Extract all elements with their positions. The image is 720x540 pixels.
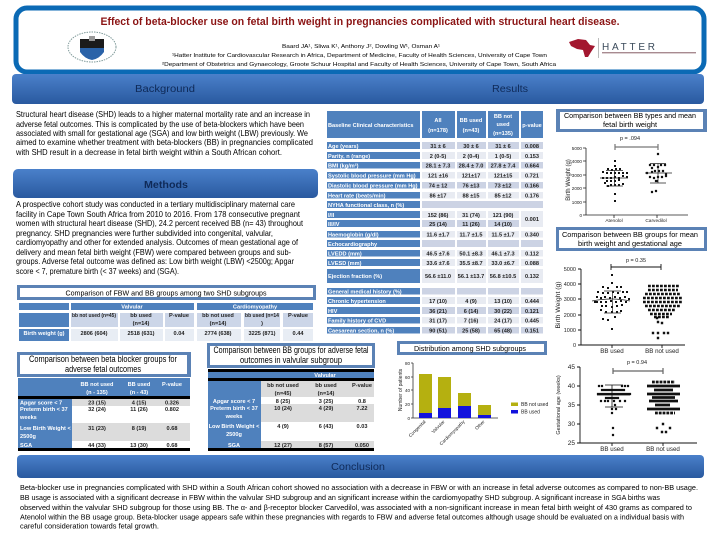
table: adverse outcomes overall: BB used bbox=[128, 382, 151, 388]
data points: BB used bbox=[598, 386, 630, 435]
table rows: values: 85 ±12 bbox=[494, 194, 512, 200]
text block: conclusion: Atenolol within the BB usage group. Beta-blocker usage appears safe within these pregnancies with regards to FBW and adverse fetal outcomes although usage should be evaluated on a individual basis with bbox=[20, 512, 684, 522]
chart: birth weight BB used vs not used: Birth Weight (g) bbox=[555, 281, 562, 329]
table: FBW by subgroup: 2806 (604) bbox=[80, 331, 108, 337]
table rows: values: 121±15 bbox=[494, 174, 512, 180]
table: adverse outcomes valvular: 4 (9) bbox=[277, 424, 289, 430]
text block: methods: delivery and mean fetal birth weight (FBW) were compared between groups and sub- bbox=[16, 247, 291, 257]
table: adverse outcomes valvular: 0.8 bbox=[358, 399, 366, 405]
text block: conclusion: observed within the valvular SHD subgroup for those using BB. The α- and β-receptor blocker Carvedilol, was associated with a non-significant increase in mean fetal birth weight of 430 grams as compared to bbox=[20, 503, 692, 512]
authors and affiliations: ¹Hatter Institute for Cardiovascular Research in Africa, Department of Medicine, Faculty of Health Sciences, University of Cape Town bbox=[172, 53, 547, 59]
text block: conclusion: careful consideration towards fetal growth. bbox=[20, 522, 159, 530]
table: adverse outcomes valvular: Preterm birth < 37 bbox=[210, 406, 258, 412]
chart: birth weight BB used vs not used: p = 0.35 bbox=[626, 258, 646, 264]
icon: Hatter logo bbox=[569, 38, 696, 58]
table: adverse outcomes overall: 2500g bbox=[20, 434, 36, 440]
table: FBW by subgroup: bb used (n=14 bbox=[245, 313, 280, 319]
table rows: values: 0.721 bbox=[525, 174, 539, 180]
table: adverse outcomes overall: 32 (24) bbox=[88, 407, 106, 413]
chart: birth weight by BB type: Birth Weight (g) bbox=[566, 159, 572, 201]
table rows: values: 76 ±13 bbox=[462, 184, 480, 190]
table: FBW by subgroup: (n=14) bbox=[133, 321, 149, 327]
section header: Methods: Methods bbox=[144, 180, 188, 191]
table rows: values: 30 ± 6 bbox=[463, 144, 479, 150]
chart: stacked bars of SHD subgroups bbox=[398, 361, 548, 446]
table rows: values: 11.7 ±1.5 bbox=[460, 232, 482, 238]
heading box: adverse outcomes: adverse fetal outcomes bbox=[65, 364, 141, 374]
table rows: labels: Family history of CVD bbox=[328, 318, 386, 324]
heading box: adverse outcomes in valvular subgroup bbox=[207, 343, 375, 368]
table rows: labels: Echocardiography bbox=[328, 242, 378, 248]
table rows: labels: HIV bbox=[328, 309, 338, 315]
table rows: values: 0.112 bbox=[525, 252, 539, 258]
heading box: distribution bbox=[397, 341, 547, 355]
table: adverse outcomes overall: 0.68 bbox=[167, 426, 177, 432]
data points: BB used bbox=[595, 275, 629, 329]
table rows: values: 33.0 ±6.7 bbox=[491, 261, 515, 267]
text block: conclusion: BB usage is associated with a significant decrease in FBW within the valvular SHD subgroup and an significant increase within the cardiomyopathy SHD subgroup. A significant increase in SGA births was bbox=[20, 493, 660, 502]
chart: gestational age BB used vs not used: 40 bbox=[568, 383, 575, 390]
table: adverse outcomes valvular: bb not used bbox=[267, 383, 299, 389]
table header: (n=135) bbox=[493, 131, 513, 137]
chart: birth weight BB used vs not used: BB used bbox=[600, 348, 624, 355]
table header: (n=43) bbox=[463, 128, 479, 134]
table header: BB used bbox=[460, 118, 483, 124]
legend: BB not used bbox=[521, 402, 548, 408]
section header: Conclusion: Conclusion bbox=[331, 462, 385, 473]
table: adverse outcomes valvular: 0.03 bbox=[357, 424, 367, 430]
table header: All bbox=[434, 118, 442, 124]
table rows: labels: NYHA functional class, n (%) bbox=[328, 203, 404, 209]
text block: background: Structural heart disease (SHD) leads to a higher maternal mortality rate and an increase in bbox=[16, 109, 310, 119]
table rows: values: 31 (74) bbox=[462, 213, 480, 219]
table: adverse outcomes overall: 31 (23) bbox=[88, 426, 106, 432]
table rows: values: 11 (26) bbox=[462, 222, 480, 228]
chart: birth weight by BB type: 4000 bbox=[572, 159, 582, 164]
table: adverse outcomes overall: Apgar score < 7 bbox=[20, 400, 62, 406]
table header: BB not bbox=[494, 114, 512, 120]
chart: birth weight by BB type: Atenolol bbox=[605, 218, 623, 224]
text block: background: adverse fetal outcomes. This is complicated by the use of beta-blockers which have been bbox=[16, 119, 304, 129]
table rows: values: 0.445 bbox=[525, 318, 539, 324]
title: Effect of beta-blocker use on fetal birth weight in pregnancies complicated with structural heart disease. bbox=[100, 16, 620, 28]
table rows: values: 2 (0-5) bbox=[430, 154, 446, 160]
heading box: adverse outcomes bbox=[17, 352, 191, 377]
text block: methods bbox=[15, 199, 304, 276]
table rows: values: 2 (0-4) bbox=[463, 154, 479, 160]
table rows: labels: Diastolic blood pressure (mm Hg) bbox=[328, 184, 418, 190]
table: adverse outcomes overall: 0.68 bbox=[167, 443, 177, 449]
heading box: adverse outcomes in valvular subgroup: outcomes in valvular subgroup bbox=[240, 355, 342, 365]
table: FBW by subgroup: Valvular bbox=[121, 304, 144, 310]
table rows: labels: III/IV bbox=[328, 222, 340, 228]
table rows: labels: Caesarean section, n (%) bbox=[328, 328, 394, 334]
table rows: values: 0.008 bbox=[525, 144, 539, 150]
legend bbox=[511, 402, 548, 416]
table: adverse outcomes overall: P-value bbox=[162, 382, 182, 388]
table rows: labels: General medical history (%) bbox=[328, 290, 402, 296]
table rows: values: 65 (48) bbox=[494, 328, 512, 334]
data points: Carvedilol bbox=[647, 154, 666, 192]
table: adverse outcomes overall: 0.802 bbox=[165, 407, 179, 413]
chart: stacked bars of SHD subgroups: Number of patients bbox=[398, 368, 404, 411]
table rows: values: 28.4 ± 7.0 bbox=[459, 164, 483, 170]
table rows: labels: LVESD (mm) bbox=[328, 261, 362, 267]
table: FBW by subgroup: 2518 (631) bbox=[127, 331, 155, 337]
table rows: values: 27.8 ± 7.4 bbox=[491, 164, 516, 170]
table: FBW by subgroup: Birth weight (g) bbox=[23, 331, 65, 337]
bar labels: Congenital bbox=[408, 419, 427, 438]
table rows: values: 30 (22) bbox=[494, 309, 512, 315]
authors and affiliations: ²Department of Obstetrics and Gynaecology, Groote Schuur Hospital and Faculty of Health Sciences, University of Cape Town, South Africa bbox=[162, 62, 557, 68]
table: FBW by subgroup: 2774 (638) bbox=[204, 331, 232, 337]
table rows: values: 0.664 bbox=[525, 164, 540, 170]
table rows: values: 17 (10) bbox=[429, 299, 447, 305]
table rows: values: 31 (17) bbox=[429, 318, 447, 324]
table rows: values: 1 (0-5) bbox=[495, 154, 511, 160]
chart: gestational age BB used vs not used: 35 bbox=[568, 402, 575, 409]
heading box: adverse outcomes: Comparison between beta blocker groups for bbox=[29, 354, 177, 364]
table: FBW by subgroup: P-value bbox=[288, 313, 308, 319]
heading: Background: Background bbox=[135, 84, 195, 95]
table: FBW by subgroup: P-value bbox=[169, 313, 189, 319]
table rows: labels: Ejection fraction (%) bbox=[328, 274, 382, 280]
table: FBW by subgroup bbox=[19, 303, 313, 341]
table rows: values: 11.5 ±1.7 bbox=[492, 232, 514, 238]
table: adverse outcomes valvular: Low Birth Weight < bbox=[209, 424, 260, 430]
chart: birth weight by BB type: 3000 bbox=[572, 173, 582, 178]
table rows: first column bbox=[327, 142, 420, 334]
table rows: values: 31 ± 6 bbox=[495, 144, 511, 150]
chart: stacked bars of SHD subgroups: 80 bbox=[405, 361, 410, 366]
table rows: values: 121 (90) bbox=[493, 213, 514, 219]
table: adverse outcomes valvular: weeks bbox=[225, 414, 242, 420]
table rows: values: 0.121 bbox=[525, 309, 539, 315]
table rows: values: 0.166 bbox=[525, 184, 539, 190]
table header: p-value bbox=[522, 123, 542, 129]
table rows: values: 36 (21) bbox=[429, 309, 447, 315]
table rows: values: 74 ± 12 bbox=[429, 184, 447, 190]
heading box: mean birth weight and gestational age: Comparison between BB groups for mean bbox=[562, 230, 698, 239]
table: adverse outcomes valvular bbox=[208, 369, 374, 451]
table: adverse outcomes valvular: bb used bbox=[315, 383, 337, 389]
table: adverse outcomes valvular: Apgar score < 7 bbox=[213, 399, 255, 405]
stacked bars bbox=[419, 374, 491, 418]
text block: background: aimed to examine whether treatment with beta-blockers (BB) in pregnancies complicated bbox=[16, 137, 313, 147]
table: FBW by subgroup: bb used bbox=[130, 313, 152, 319]
table rows: value shading bbox=[422, 142, 543, 334]
table: adverse outcomes valvular: 3 (25) bbox=[319, 399, 333, 405]
data points: Atenolol bbox=[603, 161, 627, 201]
chart: birth weight BB used vs not used: 0 bbox=[573, 343, 576, 349]
text block: methods: pregnancy. SHD pregnancies were further subdivided into congenital, valvular, bbox=[16, 228, 273, 238]
text block: methods: groups. Adverse fetal outcome was defined as: Low birth weight (LBW) <2500g; Apgar bbox=[16, 256, 294, 266]
table rows: values: 35.5 ±8.7 bbox=[459, 261, 483, 267]
text block: conclusion bbox=[20, 483, 698, 530]
table rows: labels: LVEDD (mm) bbox=[328, 252, 362, 258]
table: FBW by subgroup: 0.44 bbox=[293, 331, 304, 337]
table rows: values: 46.5 ±7.6 bbox=[426, 252, 450, 258]
table rows: labels: Age (years) bbox=[328, 144, 359, 150]
table rows: values: 25 (58) bbox=[462, 328, 480, 334]
table rows: values: 56.6 ±11.0 bbox=[425, 274, 451, 280]
table: FBW by subgroup: ) bbox=[261, 321, 263, 327]
table rows: values: 33.6 ±7.6 bbox=[426, 261, 450, 267]
legend: BB used bbox=[521, 410, 540, 416]
chart: birth weight BB used vs not used: BB not used bbox=[645, 348, 679, 355]
chart: birth weight by BB type: Carvedilol bbox=[645, 218, 667, 224]
heading box: BB types: fetal birth weight bbox=[603, 120, 658, 129]
table rows: values: 50.1 ±8.3 bbox=[459, 252, 483, 258]
table: adverse outcomes valvular: 10 (24) bbox=[274, 406, 292, 412]
table: baseline clinical characteristics bbox=[327, 111, 543, 334]
table rows: values: 90 (51) bbox=[429, 328, 447, 334]
bar labels: Cardiomyopathy bbox=[439, 419, 466, 446]
table: FBW by subgroup: bb not used (n=45) bbox=[72, 313, 116, 319]
table rows: values: 0.132 bbox=[525, 274, 539, 280]
table: adverse outcomes overall: Low Birth Weight < bbox=[20, 426, 71, 432]
section header: Conclusion bbox=[17, 455, 704, 478]
table: adverse outcomes overall: 4 (15) bbox=[132, 400, 146, 406]
chart: gestational age BB used vs not used: Gestational age (weeks) bbox=[556, 375, 562, 435]
table rows: labels: Parity, n (range) bbox=[328, 154, 370, 160]
table: adverse outcomes valvular: 12 (27) bbox=[274, 443, 292, 449]
heading box: BB types bbox=[556, 109, 707, 132]
table rows: values: 0.151 bbox=[525, 328, 539, 334]
chart: birth weight BB used vs not used: 1000 bbox=[564, 328, 576, 334]
chart: birth weight by BB type: p = .094 bbox=[620, 136, 640, 142]
table rows: values: 0.088 bbox=[525, 261, 539, 267]
chart: birth weight by BB type: 5000 bbox=[572, 146, 582, 151]
chart: gestational age BB used vs not used: BB used bbox=[600, 446, 624, 453]
table rows: labels bbox=[328, 144, 418, 334]
table: adverse outcomes overall: SGA bbox=[20, 443, 32, 449]
table rows: values: 46.1 ±7.3 bbox=[491, 252, 515, 258]
chart: stacked bars of SHD subgroups: 0 bbox=[407, 416, 410, 421]
table rows: values: 24 (17) bbox=[494, 318, 512, 324]
chart: birth weight BB used vs not used: 2000 bbox=[564, 313, 576, 319]
table: FBW by subgroup: 0.04 bbox=[174, 331, 185, 337]
table: adverse outcomes valvular: (n=14) bbox=[318, 391, 334, 397]
table rows: values bbox=[425, 144, 540, 334]
authors and affiliations: Baard JA¹, Sliwa K¹, Anthony J², Dowling W¹, Osman A¹ bbox=[282, 44, 440, 50]
section header bar: Background and Results bbox=[12, 74, 704, 104]
bar labels: Valvular bbox=[431, 419, 446, 434]
chart: gestational age BB used vs not used: 30 bbox=[568, 421, 575, 428]
heading box: mean birth weight and gestational age: birth weight and gestational age bbox=[578, 239, 682, 248]
table rows: values: 88 ±15 bbox=[462, 194, 480, 200]
table rows: values: 28.1 ± 7.3 bbox=[426, 164, 450, 170]
table rows: labels: Systolic blood pressure (mm Hg) bbox=[328, 174, 416, 180]
chart: stacked bars of SHD subgroups: 40 bbox=[405, 388, 410, 393]
table rows: values: 73 ±12 bbox=[494, 184, 512, 190]
table: adverse outcomes valvular: 6 (43) bbox=[319, 424, 333, 430]
table: adverse outcomes overall: 23 (15) bbox=[88, 400, 106, 406]
data points: BB not used bbox=[647, 382, 680, 413]
table rows: values: 4 (9) bbox=[465, 299, 477, 305]
chart: gestational age BB used vs not used: BB not used bbox=[646, 446, 680, 453]
table rows: values: 86 ±17 bbox=[429, 194, 447, 200]
chart: birth weight by BB type bbox=[566, 136, 688, 224]
chart: gestational age BB used vs not used: p = 0.94 bbox=[627, 360, 647, 366]
table: adverse outcomes valvular: SGA bbox=[228, 443, 240, 449]
chart: birth weight by BB type: 0 bbox=[579, 213, 582, 218]
chart: birth weight BB used vs not used: 5000 bbox=[564, 267, 576, 273]
table header: used bbox=[496, 122, 510, 128]
table: adverse outcomes valvular: (n=45) bbox=[275, 391, 291, 397]
table: adverse outcomes overall: 13 (30) bbox=[130, 443, 148, 449]
table: adverse outcomes overall: 44 (33) bbox=[88, 443, 106, 449]
table: adverse outcomes valvular: P-value bbox=[352, 383, 372, 389]
table rows: values: 56.1 ±13.7 bbox=[458, 274, 484, 280]
table: adverse outcomes valvular: 4 (29) bbox=[319, 406, 333, 412]
text block: background: associated with small for gestational age (SGA) and low birth weight (LBW) previously. We bbox=[16, 128, 308, 138]
table: adverse outcomes overall: 0.326 bbox=[165, 400, 179, 406]
table rows: labels: BMI (kg/m²) bbox=[328, 162, 359, 170]
heading box: mean birth weight and gestational age bbox=[556, 227, 707, 251]
text block: methods: A prospective cohort study was conducted in a tertiary multidisciplinary maternal care bbox=[16, 199, 295, 209]
table rows: labels: Haemoglobin (g/dl) bbox=[328, 232, 379, 238]
table rows: values: 13 (10) bbox=[494, 299, 512, 305]
heading box: FBW comparison: Comparison of FBW and BB groups among two SHD subgroups bbox=[66, 288, 267, 298]
table rows: values: 121 ±16 bbox=[428, 174, 448, 180]
chart: birth weight BB used vs not used: 4000 bbox=[564, 282, 576, 288]
table rows: values: 0.001 bbox=[525, 217, 539, 223]
table: adverse outcomes overall: weeks bbox=[19, 415, 37, 421]
table rows: values: 0.153 bbox=[525, 154, 539, 160]
chart: gestational age BB used vs not used: 25 bbox=[568, 440, 575, 447]
text block: methods: women with structural heart disease (SHD), 24.2 percent received BB (n= 43) throughout bbox=[15, 218, 304, 228]
table rows: labels: Heart rate (beats/min) bbox=[328, 194, 386, 200]
table rows: values: 0.444 bbox=[525, 299, 540, 305]
chart: gestational age BB used vs not used: 45 bbox=[568, 364, 575, 371]
table rows: labels: I/II bbox=[328, 213, 335, 219]
text block: background bbox=[15, 109, 313, 157]
bar labels bbox=[408, 419, 486, 446]
table rows: values: 25 (14) bbox=[429, 222, 447, 228]
chart: gestational age BB used vs not used bbox=[556, 360, 697, 453]
text block: methods: score < 7, premature birth (< 37 weeks) and (SGA). bbox=[16, 266, 179, 276]
table rows: values: 0.340 bbox=[525, 232, 539, 238]
text block: methods: facility in Cape Town South Africa from 2010 to 2016. From 178 consecutive pregnant bbox=[16, 209, 301, 219]
table rows: values: 14 (10) bbox=[494, 222, 512, 228]
table rows: values: 6 (14) bbox=[464, 309, 478, 315]
table: adverse outcomes overall: 11 (26) bbox=[130, 407, 148, 413]
table: adverse outcomes valvular: 0.050 bbox=[355, 443, 369, 449]
bar labels: Other bbox=[474, 419, 486, 431]
table: adverse outcomes overall: Preterm birth < 37 bbox=[20, 407, 68, 413]
table: adverse outcomes valvular: Valvular bbox=[314, 373, 337, 379]
table header: (n=178) bbox=[428, 128, 448, 134]
header panel bbox=[16, 8, 704, 72]
table rows: values: 152 (86) bbox=[428, 213, 449, 219]
table: FBW by subgroup: (n=14) bbox=[210, 321, 226, 327]
table: FBW by subgroup: bb not used bbox=[202, 313, 234, 319]
heading box: distribution: Distribution among SHD subgroups bbox=[414, 344, 526, 353]
heading: Results: Results bbox=[492, 84, 528, 95]
table: adverse outcomes overall: (n - 43) bbox=[130, 390, 148, 396]
table header bbox=[327, 111, 543, 138]
table: adverse outcomes overall: (n - 135) bbox=[86, 390, 108, 396]
text block: background: with SHD result in a decrease in fetal birth weight within a South African cohort. bbox=[15, 147, 282, 157]
table: adverse outcomes overall: 8 (19) bbox=[132, 426, 146, 432]
text block: methods: cardiomyopathy and other for extended analysis. Outcomes of mean gestational age of bbox=[16, 237, 299, 247]
table rows: values: 56.8 ±10.5 bbox=[490, 274, 516, 280]
table rows: values: 31 ± 6 bbox=[430, 144, 446, 150]
chart: stacked bars of SHD subgroups: 60 bbox=[405, 375, 410, 380]
table header: Baseline Clinical characteristics bbox=[328, 123, 414, 129]
heading box: BB types: Comparison between BB types and mean bbox=[564, 111, 696, 120]
chart: birth weight BB used vs not used bbox=[555, 258, 685, 355]
table rows: values: 11.6 ±1.7 bbox=[427, 232, 449, 238]
table rows: values: 7 (16) bbox=[464, 318, 478, 324]
table rows: values: 0.176 bbox=[525, 194, 539, 200]
heading box: adverse outcomes in valvular subgroup: Comparison between BB groups for adverse fetal bbox=[214, 345, 369, 355]
table: adverse outcomes valvular: 8 (25) bbox=[276, 399, 290, 405]
table: adverse outcomes valvular: 8 (57) bbox=[319, 443, 333, 449]
table: FBW by subgroup: Cardiomyopathy bbox=[233, 304, 278, 310]
authors and affiliations bbox=[162, 44, 557, 68]
table: adverse outcomes valvular: 7.22 bbox=[357, 406, 367, 412]
table rows: labels: Chronic hypertension bbox=[328, 299, 386, 305]
table: adverse outcomes overall bbox=[18, 378, 190, 451]
chart: birth weight by BB type: 2000 bbox=[572, 186, 582, 191]
heading box: FBW comparison bbox=[17, 285, 316, 300]
chart: birth weight by BB type: 1000 bbox=[572, 200, 582, 205]
table: adverse outcomes overall: BB not used bbox=[81, 382, 114, 388]
chart: stacked bars of SHD subgroups: 20 bbox=[405, 402, 410, 407]
icon: university crest bbox=[68, 32, 116, 62]
icon: Hatter logo: HATTER bbox=[602, 42, 655, 53]
chart: birth weight BB used vs not used: 3000 bbox=[564, 297, 576, 303]
section header: Methods bbox=[13, 169, 318, 198]
text block: conclusion: Beta-blocker use in pregnancies complicated with SHD within a South African cohort showed no association with a decrease in FBW or with an increase in fetal adverse outcomes as compared to non-BB usage. bbox=[20, 483, 698, 492]
table: adverse outcomes valvular: 2500g bbox=[226, 432, 243, 438]
table: FBW by subgroup: 3225 (871) bbox=[248, 331, 276, 337]
table rows: values: 121±17 bbox=[462, 174, 480, 180]
data points: BB not used bbox=[643, 286, 682, 317]
